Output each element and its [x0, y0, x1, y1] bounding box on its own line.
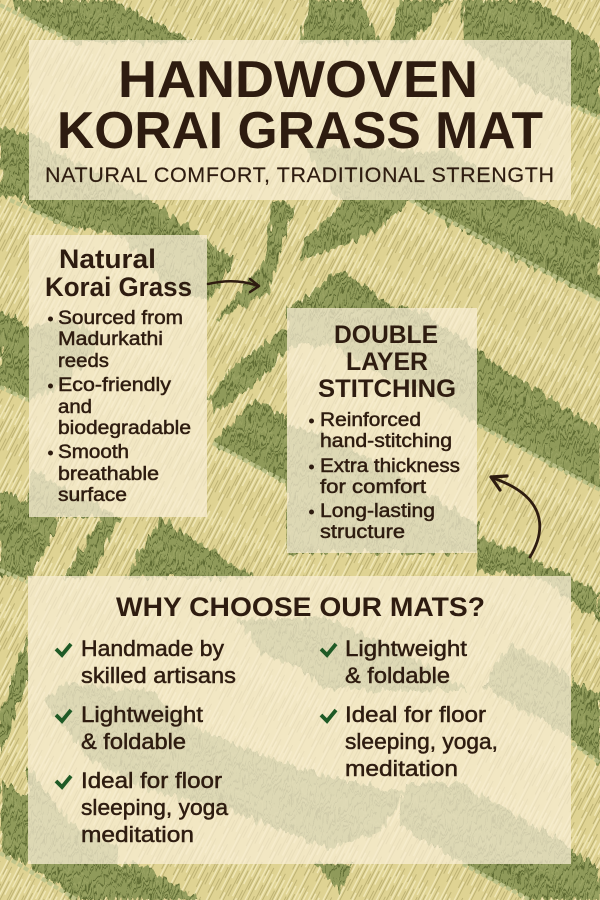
list: right column: & foldable: [345, 663, 450, 688]
panel: natural korai grass: [29, 235, 207, 517]
icon: check: [321, 710, 336, 721]
list: natural korai grass: Sourced from: [58, 308, 183, 329]
list: double layer stitching: Extra thickness: [320, 456, 460, 477]
list: left column: & foldable: [81, 729, 186, 754]
list: right column: Lightweight: [345, 636, 467, 661]
list: left column: meditation: [81, 822, 194, 847]
heading: natural korai grass: [45, 244, 192, 302]
title: HANDWOVEN: [118, 51, 478, 109]
heading: double layer stitching: DOUBLE: [334, 321, 438, 349]
list: natural korai grass: [48, 308, 191, 506]
icon: check: [56, 710, 71, 721]
arrow: natural grass to mat: [208, 279, 259, 292]
icon: check: [56, 644, 71, 655]
list: natural korai grass: and: [58, 397, 92, 418]
list: double layer stitching: Long-lasting: [320, 501, 435, 522]
list: natural korai grass: Eco-friendly: [58, 375, 172, 396]
heading: natural korai grass: Korai Grass: [45, 272, 192, 302]
list: right column: sleeping, yoga,: [345, 729, 498, 754]
list: right column: meditation: [345, 756, 458, 781]
list: double layer stitching: Reinforced: [320, 410, 421, 431]
heading: double layer stitching: STITCHING: [318, 375, 456, 403]
title: [57, 51, 543, 160]
list: natural korai grass: surface: [58, 485, 127, 506]
list: natural korai grass: Smooth: [58, 442, 129, 463]
list: natural korai grass: reeds: [58, 351, 109, 372]
panel: title: [29, 40, 571, 200]
list: left column: Lightweight: [81, 702, 203, 727]
heading: double layer stitching: LAYER: [346, 348, 428, 376]
list: double layer stitching: for comfort: [320, 477, 427, 498]
heading: double layer stitching: [318, 321, 456, 403]
panel: why choose our mats: [28, 576, 571, 864]
subtitle: NATURAL COMFORT, TRADITIONAL STRENGTH: [45, 163, 554, 187]
panel: double layer stitching: [287, 308, 477, 553]
list: natural korai grass: biodegradable: [58, 418, 191, 439]
list: left column: skilled artisans: [81, 663, 236, 688]
heading: natural korai grass: Natural: [59, 244, 156, 274]
list: double layer stitching: structure: [320, 522, 405, 543]
list: left column: Ideal for floor: [81, 768, 222, 793]
list: left column: Handmade by: [81, 636, 224, 661]
list: double layer stitching: hand-stitching: [320, 431, 452, 452]
icon: check: [321, 644, 336, 655]
list: double layer stitching: [309, 410, 460, 543]
list: natural korai grass: breathable: [58, 464, 159, 485]
list: right column: [321, 636, 498, 781]
icon: check: [56, 776, 71, 787]
list: right column: Ideal for floor: [345, 702, 486, 727]
heading: why choose our mats: WHY CHOOSE OUR MATS?: [116, 592, 485, 622]
arrow: curved to stitching panel: [491, 476, 540, 557]
list: left column: [56, 636, 236, 847]
title: KORAI GRASS MAT: [57, 102, 543, 160]
list: natural korai grass: Madurkathi: [58, 329, 163, 350]
list: left column: sleeping, yoga: [81, 795, 229, 820]
